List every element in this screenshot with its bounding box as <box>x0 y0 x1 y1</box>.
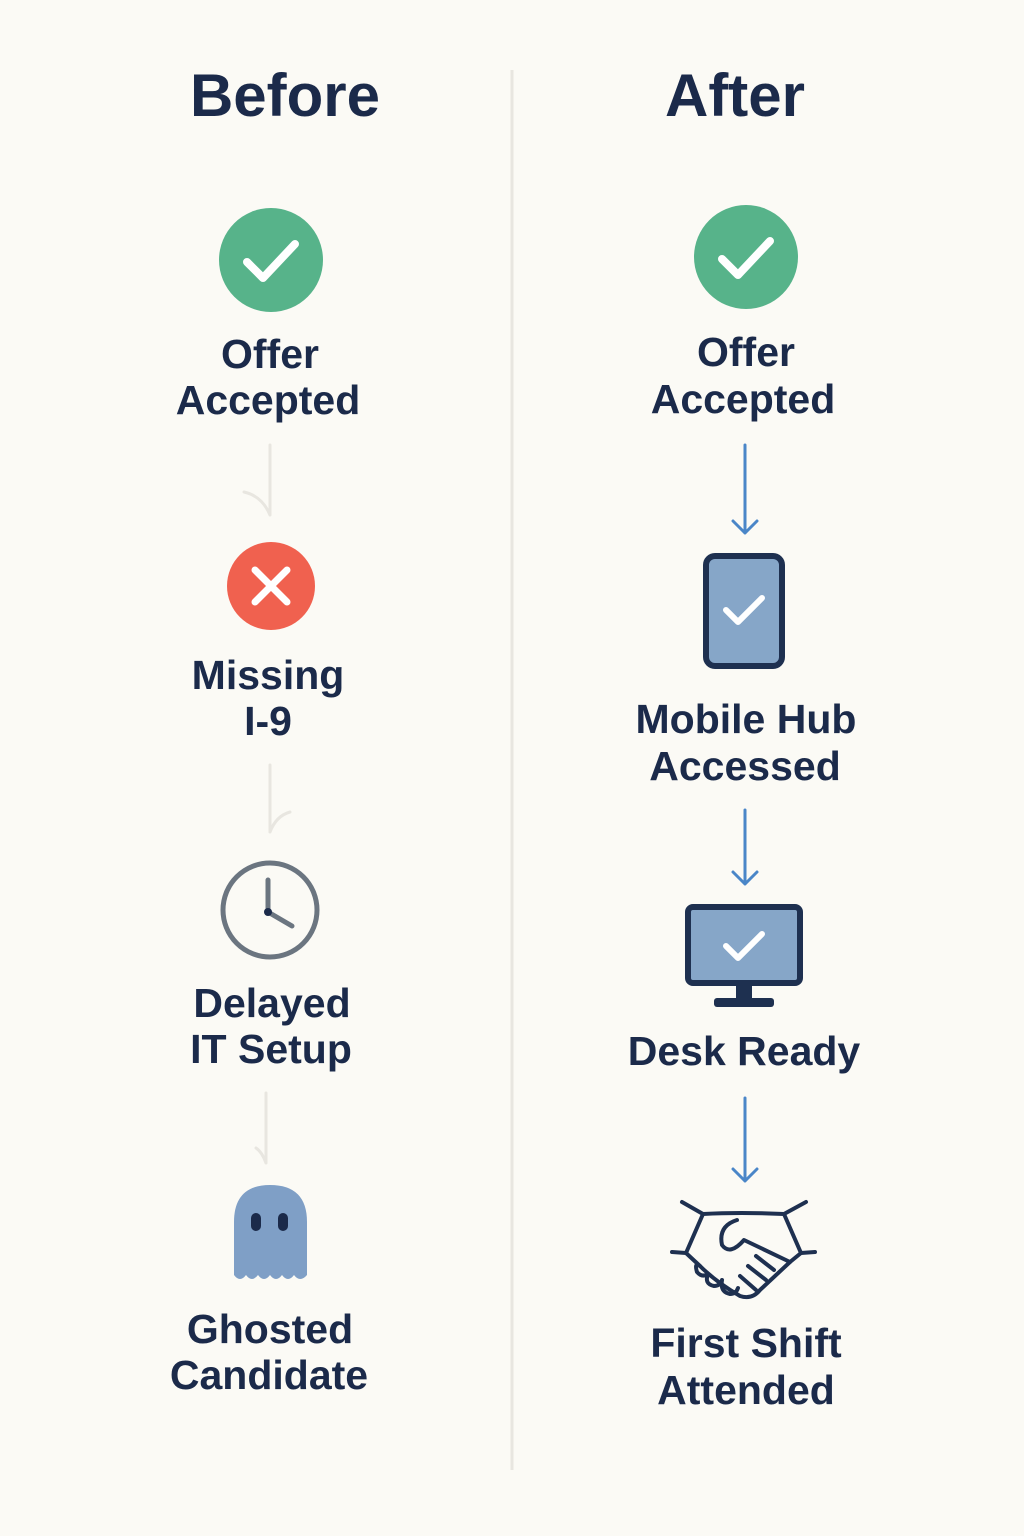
label: offer accepted: Accepted <box>176 377 360 423</box>
icon: red x circle <box>227 542 315 630</box>
arrow: faint <box>244 445 270 515</box>
before: ghosted candidate <box>170 1185 368 1398</box>
arrow: blue <box>733 445 757 533</box>
icon: handshake <box>672 1202 815 1297</box>
label: desk ready: Desk Ready <box>628 1028 860 1074</box>
icon: monitor <box>688 907 800 1007</box>
arrow: blue <box>733 810 757 884</box>
icon: phone <box>706 556 782 666</box>
after: mobile hub <box>636 556 856 789</box>
after: desk ready <box>628 907 860 1074</box>
label: delayed IT setup: IT Setup <box>190 1026 352 1072</box>
label: missing I-9: Missing <box>192 652 344 698</box>
icon: green check circle <box>219 208 323 312</box>
before: missing I-9 <box>192 542 344 744</box>
after: offer accepted <box>651 205 835 422</box>
label: offer accepted: Offer <box>697 329 795 375</box>
label: mobile hub accessed: Mobile Hub <box>636 696 856 742</box>
label: mobile hub accessed: Accessed <box>649 743 841 789</box>
title: Before: Before <box>190 62 380 129</box>
arrow: faint <box>270 765 290 832</box>
label: first shift attended: Attended <box>657 1367 835 1413</box>
title: After: After <box>665 62 805 129</box>
label: offer accepted: Accepted <box>651 376 835 422</box>
icon: clock <box>223 863 317 957</box>
arrow: blue <box>733 1098 757 1181</box>
label: delayed IT setup: Delayed <box>193 980 351 1026</box>
before: delayed IT setup <box>190 863 352 1072</box>
arrow: faint <box>256 1093 266 1163</box>
label: ghosted candidate: Ghosted <box>187 1306 353 1352</box>
icon: green check circle <box>694 205 798 309</box>
before: offer accepted <box>176 208 360 423</box>
after: first shift attended <box>650 1202 842 1413</box>
label: ghosted candidate: Candidate <box>170 1352 368 1398</box>
label: offer accepted: Offer <box>221 331 319 377</box>
label: first shift attended: First Shift <box>650 1320 842 1366</box>
label: missing I-9: I-9 <box>244 698 292 744</box>
icon: ghost <box>234 1185 307 1279</box>
